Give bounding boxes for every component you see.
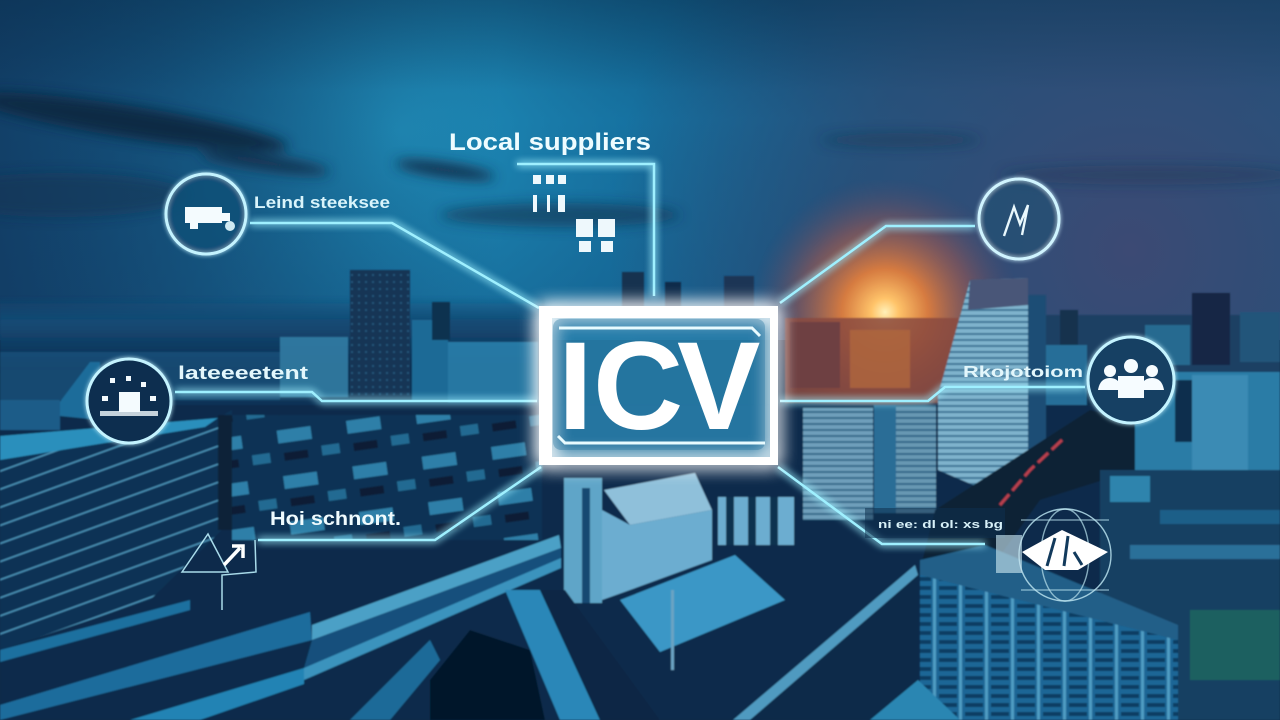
label: lower right data strip [865, 508, 1005, 538]
lower-middle road [505, 590, 600, 720]
label: Local suppliers: Local suppliers [449, 129, 651, 156]
circle: truck icon [166, 174, 246, 254]
label: lower right data strip: ni ee: dl ol: xs bg [878, 519, 1003, 531]
far skyline right [785, 318, 960, 403]
connector: left circle to ICV [175, 392, 537, 401]
circle: left icon [87, 359, 171, 443]
connector: right circle to ICV [780, 387, 1085, 401]
icon: lower right wireframe globe [996, 509, 1111, 601]
label: lower left: Hoi schnont. [270, 509, 401, 530]
icon: cluster of squares [100, 376, 158, 416]
tall dark tower [350, 270, 410, 400]
icon: three people [1098, 359, 1164, 398]
mid-ground base [0, 405, 1280, 720]
connector: truck to ICV [250, 223, 539, 308]
right light building [1135, 372, 1280, 472]
central ICV box [539, 306, 778, 465]
lower-right residential block [920, 572, 1178, 720]
icon: angular mark [1004, 205, 1028, 236]
icon: lower left arrow and triangle [182, 534, 256, 610]
mid towers [803, 408, 873, 520]
icon: local suppliers grid [533, 175, 615, 252]
sun glow on the horizon [750, 180, 1020, 440]
circle: top right icon [979, 179, 1059, 259]
dark block with traffic [920, 410, 1135, 570]
connector lines [175, 164, 1085, 544]
label: left circle: lateeeetent [178, 363, 308, 383]
background: dusk sky [0, 0, 1280, 340]
left striped office block [0, 410, 232, 650]
icon: truck [185, 207, 235, 231]
label: truck circle: Leind steeksee [254, 193, 390, 212]
right main tower [938, 278, 1028, 490]
far skyline left [0, 296, 545, 426]
connector: local suppliers to ICV [517, 164, 654, 296]
connector: lower left to ICV [258, 467, 541, 540]
city skyline and buildings [0, 270, 1280, 720]
lower-left elevated road [0, 600, 190, 662]
connector: top right circle to ICV [780, 226, 975, 303]
ICV heading: ICV [558, 317, 760, 456]
circle: right people icon [1088, 337, 1174, 423]
connector: lower right to ICV [778, 467, 985, 544]
label: right circle: Rkojotoiom [963, 364, 1083, 381]
central warehouse [564, 478, 602, 603]
